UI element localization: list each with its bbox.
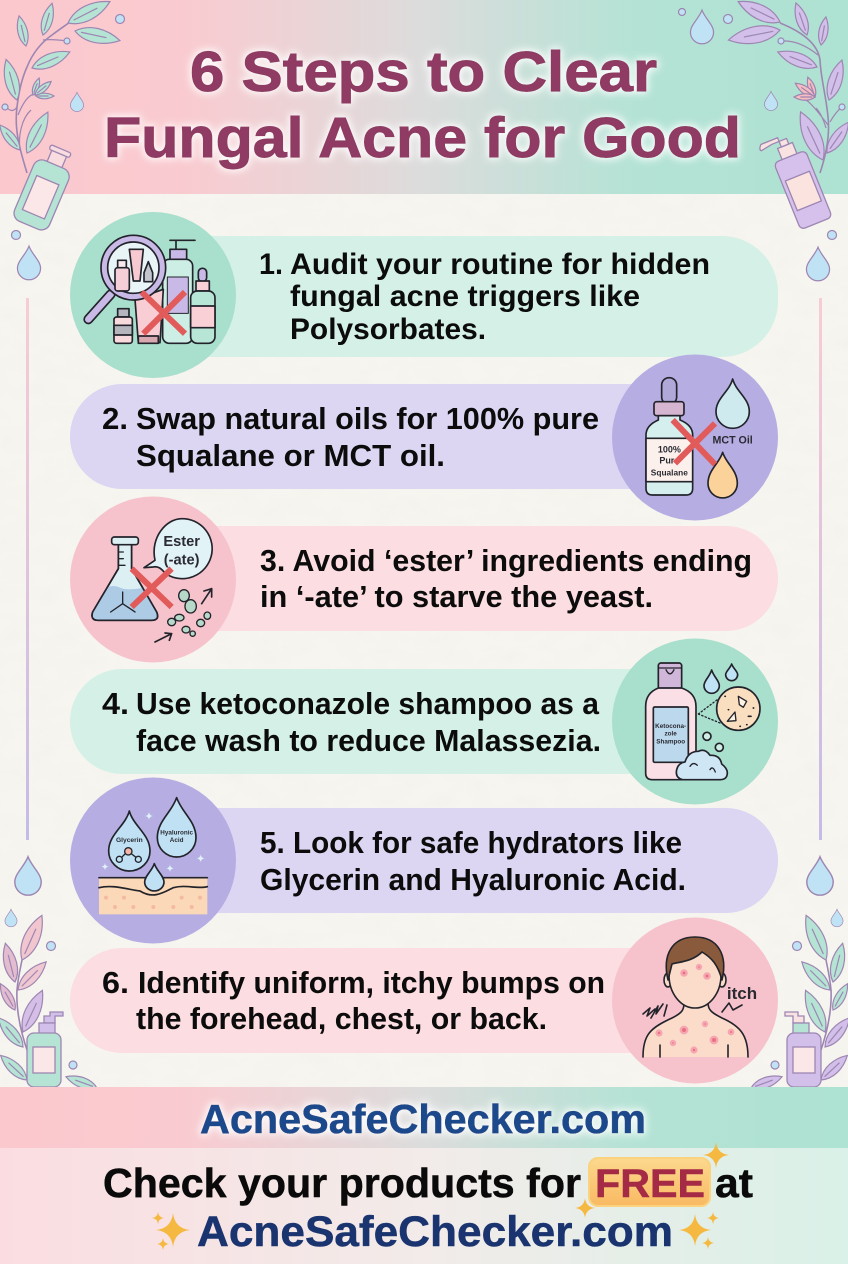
icon: squalane bottle and MCT oil drops (646, 378, 753, 498)
FREE badge: FREE (595, 1162, 705, 1206)
icon: hydrating drops over skin: Glycerin (116, 837, 143, 844)
panel: step 1 (70, 212, 778, 378)
call to action text: at (715, 1160, 753, 1206)
step 2 text: 2. (102, 401, 128, 436)
title: 6 Steps to Clear (190, 40, 657, 104)
icon: flask with ester speech bubble and yeast: (-ate) (164, 553, 200, 569)
icon: bottom left pump bottle (27, 1012, 63, 1087)
call to action website: AcneSafeChecker.com (197, 1208, 673, 1256)
sparkles (152, 1142, 729, 1250)
step 1 text: fungal acne triggers like (290, 280, 640, 313)
step 4 text: 4. (102, 686, 129, 721)
header band (0, 0, 848, 194)
panel: step 3 (70, 496, 778, 662)
icon: ketoconazole shampoo and microscope view: zole (665, 731, 677, 738)
icon: magnifier over products with red X (88, 239, 215, 343)
icon: hydrating drops over skin (99, 798, 207, 914)
icon: flask with ester speech bubble and yeast (92, 519, 212, 642)
icon: bottom right pump bottle (785, 1012, 821, 1087)
icon: person with itchy bumps (643, 937, 757, 1057)
decoration: bottom left foliage (0, 857, 99, 1093)
step 6 text: 6. (102, 965, 129, 1000)
step 1 text: Audit your routine for hidden (290, 248, 710, 281)
step 2 text: Squalane or MCT oil. (136, 438, 445, 473)
step 6 text: Identify uniform, itchy bumps on (138, 965, 605, 1000)
decoration: bottom right foliage (749, 857, 848, 1093)
icon: hydrating drops over skin: Acid (170, 837, 184, 844)
step 5 text: 5. Look for safe hydrators like (260, 825, 682, 860)
panel: step 4 (70, 638, 778, 804)
lower call to action (0, 1142, 848, 1264)
footer band (0, 1087, 848, 1148)
footer website heading: AcneSafeChecker.com (200, 1096, 646, 1142)
step 1 text (259, 248, 710, 346)
icon: ketoconazole shampoo and microscope view: Ketocona- (655, 723, 686, 730)
icon: squalane bottle and MCT oil drops: Squalane (651, 467, 688, 477)
decoration: top left foliage (0, 0, 124, 280)
step 2 text: Swap natural oils for 100% pure (136, 401, 599, 436)
panel: step 2 (70, 354, 778, 520)
left side line (26, 298, 29, 840)
panel: step 6 (70, 918, 778, 1084)
step 4 text (102, 686, 601, 758)
decoration: top right foliage (678, 0, 848, 281)
icon: squalane bottle and MCT oil drops: Pure (659, 455, 679, 465)
panel: step 5 (70, 778, 778, 944)
call to action text: Check your products for (103, 1160, 581, 1206)
step 1 text: 1. (259, 248, 283, 281)
title: Fungal Acne for Good (104, 106, 741, 170)
step 4 text: Use ketoconazole shampoo as a (136, 686, 600, 721)
icon: hydrating drops over skin: Hyaluronic (160, 830, 193, 837)
icon: left mint bottle (11, 141, 79, 233)
step 4 text: face wash to reduce Malassezia. (136, 723, 601, 758)
step 3 text: in ‘-ate’ to starve the yeast. (260, 579, 653, 614)
step 3 text (260, 543, 752, 614)
icon: squalane bottle and MCT oil drops: MCT Oil (713, 435, 753, 447)
step 5 text: Glycerin and Hyaluronic Acid. (260, 862, 686, 897)
icon: ketoconazole shampoo and microscope view: Shampoo (656, 738, 685, 745)
icon: squalane bottle and MCT oil drops: 100% (658, 444, 681, 454)
title (104, 40, 741, 170)
step 6 text (102, 965, 605, 1036)
icon: ketoconazole shampoo and microscope view (646, 663, 760, 780)
step 3 text: 3. Avoid ‘ester’ ingredients ending (260, 543, 752, 578)
step 6 text: the forehead, chest, or back. (136, 1001, 547, 1036)
step 5 text (260, 825, 686, 897)
step 2 text (102, 401, 599, 473)
icon: flask with ester speech bubble and yeast: Ester (163, 534, 200, 550)
step 1 text: Polysorbates. (290, 313, 486, 346)
right side line (819, 298, 822, 840)
icon: right lavender pump bottle (758, 130, 832, 233)
icon: person with itchy bumps: itch (727, 984, 757, 1003)
